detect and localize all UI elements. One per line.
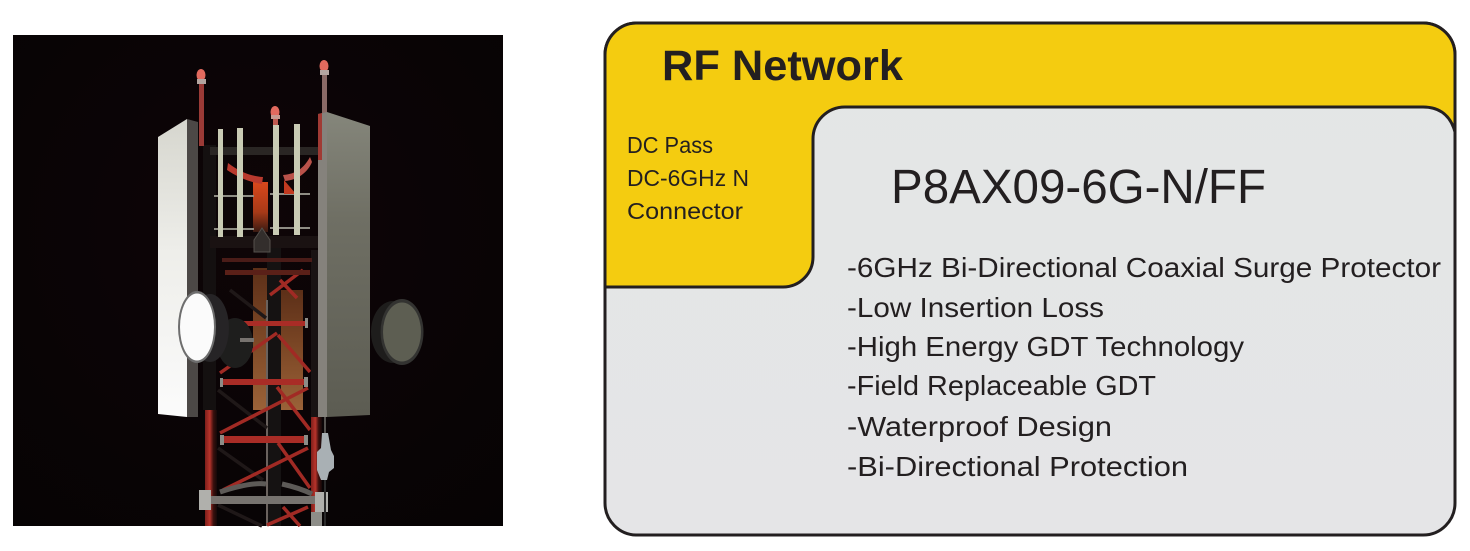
photo: telecom tower with antennas: [13, 35, 503, 526]
tower structure: [199, 145, 328, 526]
feature list: -Waterproof Design: [847, 411, 1112, 442]
side text: connector details: DC Pass: [627, 132, 713, 158]
feature list: [847, 252, 1441, 482]
feature list: -6GHz Bi-Directional Coaxial Surge Protector: [847, 252, 1441, 283]
feature list: -Bi-Directional Protection: [847, 451, 1188, 482]
yellow header tab: [605, 23, 1455, 287]
side text: connector details: [627, 132, 749, 224]
panel: RF Network product card: [605, 23, 1455, 535]
heading: RF Network: [662, 42, 903, 90]
side text: connector details: Connector: [627, 198, 743, 224]
feature list: -Low Insertion Loss: [847, 292, 1104, 323]
cable connector: [317, 417, 334, 526]
feature list: -Field Replaceable GDT: [847, 370, 1156, 401]
dipole rods: [218, 124, 300, 237]
side text: connector details: DC-6GHz N: [627, 165, 749, 191]
right panel antenna: [318, 112, 370, 417]
product model number: P8AX09-6G-N/FF: [891, 161, 1266, 214]
right dish antenna: [371, 299, 424, 365]
left panel antenna: [158, 119, 198, 417]
antenna poles and beacons: [196, 60, 329, 146]
left dish antenna: [178, 291, 254, 368]
card gray background: [605, 23, 1455, 535]
feature list: -High Energy GDT Technology: [847, 331, 1244, 362]
